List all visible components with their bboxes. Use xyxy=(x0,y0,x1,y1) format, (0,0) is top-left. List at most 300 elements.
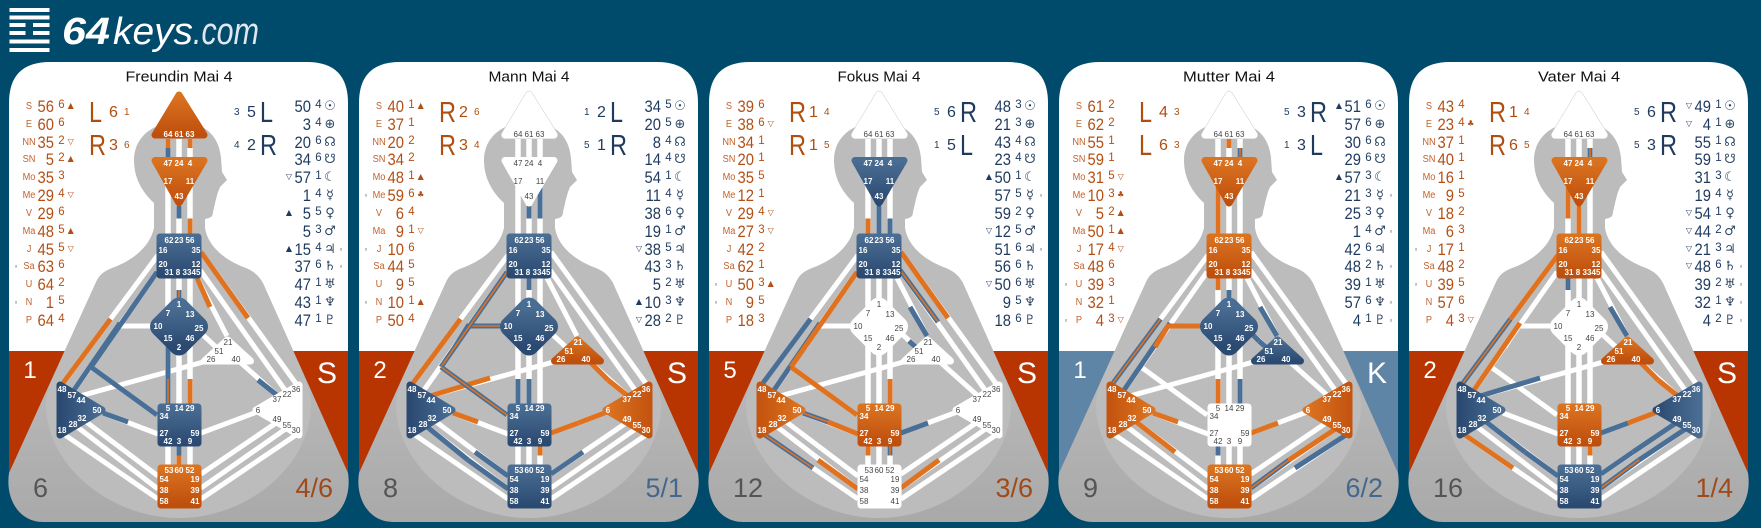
center: G: 46 xyxy=(536,334,545,343)
center: sacral: 34 xyxy=(860,412,869,421)
heading: Vater Mai 4 xyxy=(1538,68,1620,86)
center: sacral: 9 xyxy=(888,437,893,446)
center: heart: 51 xyxy=(915,347,924,356)
center: solar plexus xyxy=(256,385,301,435)
center: ajna: 11 xyxy=(1586,177,1595,186)
design gate table: N xyxy=(1076,297,1082,308)
center: solar plexus: 37 xyxy=(623,395,632,404)
center: root: 60 xyxy=(1225,466,1234,475)
design gate table: P xyxy=(1076,315,1082,326)
personality gate table: я xyxy=(1740,318,1743,324)
center: throat xyxy=(1559,236,1601,277)
personality gate table: 1 xyxy=(1365,277,1372,289)
design gate table: 1 xyxy=(408,224,415,236)
center: sacral: 34 xyxy=(510,412,519,421)
design gate table: ▲ xyxy=(68,101,75,110)
variable arrows right: 3 xyxy=(1297,137,1306,154)
center: throat: 16 xyxy=(1209,246,1218,255)
design gate table: U xyxy=(26,279,32,290)
body silhouette xyxy=(1408,122,1749,522)
design gate table: Me xyxy=(1073,190,1086,201)
band labels and bottom numbers: S xyxy=(667,357,687,390)
design gate table: NN xyxy=(1072,137,1086,148)
variable arrows left: 1 xyxy=(1509,104,1518,121)
center: root: 39 xyxy=(891,486,900,495)
center: heart: 51 xyxy=(1265,347,1274,356)
center: spleen: 32 xyxy=(78,414,87,423)
center: root: 19 xyxy=(1591,475,1600,484)
design gate table: S xyxy=(26,101,32,112)
personality gate table: ☊ xyxy=(324,135,336,150)
center: ajna: 4 xyxy=(1588,159,1593,168)
personality gate table: 51 xyxy=(995,241,1011,259)
design gate table: 1 xyxy=(46,294,54,312)
band labels and bottom numbers: 8 xyxy=(383,473,398,503)
center: spleen: 28 xyxy=(1119,420,1128,429)
center: root: 41 xyxy=(1241,497,1250,506)
center: head: 63 xyxy=(1236,130,1245,139)
band labels and bottom numbers xyxy=(23,357,337,503)
personality gate table: ♀ xyxy=(1375,206,1385,221)
design gate table: 1 xyxy=(408,99,415,111)
logo: 64keys.com xyxy=(10,8,259,53)
center: throat: 62 xyxy=(165,236,174,245)
center: sacral xyxy=(1560,404,1600,446)
design gate table: NN xyxy=(722,137,736,148)
design gate table: 48 xyxy=(1438,258,1454,276)
center: G xyxy=(1204,300,1254,352)
design gate table: 2 xyxy=(58,135,65,147)
design gate table: 9 xyxy=(396,276,404,294)
personality gate table: 1 xyxy=(315,277,322,289)
personality gate table: ☿ xyxy=(326,188,334,203)
personality gate table: 6 xyxy=(1365,152,1372,164)
design gate table: 10 xyxy=(1088,187,1104,205)
center: sacral xyxy=(160,404,200,446)
center: root: 58 xyxy=(860,497,869,506)
personality gate table: 4 xyxy=(665,152,672,164)
band labels and bottom numbers xyxy=(723,357,1037,503)
personality gate table: 43 xyxy=(295,294,311,312)
center: throat: 8 xyxy=(526,268,531,277)
center: ajna: 24 xyxy=(525,159,534,168)
center: ajna: 24 xyxy=(175,159,184,168)
center: heart: 26 xyxy=(1257,355,1266,364)
personality gate table: 29 xyxy=(1345,151,1361,169)
design gate table: 4 xyxy=(58,188,65,200)
center: throat: 31 xyxy=(1215,268,1224,277)
design gate table: 18 xyxy=(1438,205,1454,223)
center: sacral: 5 xyxy=(166,404,171,413)
body silhouette xyxy=(1058,122,1399,522)
center: heart: 40 xyxy=(1282,355,1291,364)
center: throat: 31 xyxy=(165,268,174,277)
center: solar plexus: 30 xyxy=(292,426,301,435)
center: root: 52 xyxy=(1586,466,1595,475)
band labels and bottom numbers xyxy=(373,357,687,503)
design gate table: 50 xyxy=(738,276,754,294)
design gate table: Mo xyxy=(1423,172,1436,183)
variable arrows left: 2 xyxy=(459,104,468,121)
personality gate table: ☉ xyxy=(1374,99,1386,114)
center: head xyxy=(1205,95,1254,139)
center: root xyxy=(1210,466,1250,506)
design gate table: J xyxy=(1427,244,1431,255)
band labels and bottom numbers: 1/4 xyxy=(1695,473,1733,503)
channels xyxy=(763,139,997,499)
design gate table: 35 xyxy=(38,134,54,152)
center: spleen: 50 xyxy=(1493,406,1502,415)
center: sacral: 29 xyxy=(1236,404,1245,413)
center: spleen: 32 xyxy=(778,414,787,423)
design gate table: 1 xyxy=(1108,135,1115,147)
center: throat: 33 xyxy=(183,268,192,277)
center: G: 1 xyxy=(1227,300,1232,309)
center: G: 13 xyxy=(186,310,195,319)
design gate table: 39 xyxy=(1438,276,1454,294)
personality gate table xyxy=(1336,98,1393,330)
variable arrows right: 4 xyxy=(234,140,240,151)
personality gate table xyxy=(1686,98,1743,330)
center: sacral: 5 xyxy=(866,404,871,413)
center: solar plexus: 36 xyxy=(292,385,301,394)
center: root: 60 xyxy=(525,466,534,475)
design gate table: 56 xyxy=(38,98,54,116)
variable arrows left: 3 xyxy=(459,137,468,154)
variable arrows right: 2 xyxy=(247,137,256,154)
personality gate table: 18 xyxy=(995,312,1011,330)
variable arrows left: 4 xyxy=(824,107,830,118)
center: sacral: 34 xyxy=(1560,412,1569,421)
type band xyxy=(359,351,698,478)
personality gate table: ♇ xyxy=(1724,313,1736,328)
center: head xyxy=(855,95,904,139)
design gate table: 6 xyxy=(1458,295,1465,307)
personality gate table: ▽ xyxy=(1686,244,1693,253)
center: root xyxy=(160,466,200,506)
center: throat: 12 xyxy=(542,260,551,269)
center: throat: 20 xyxy=(1559,260,1568,269)
band labels and bottom numbers: 5/1 xyxy=(645,473,683,503)
design gate table: Ma xyxy=(1073,226,1086,237)
center: G: 46 xyxy=(1586,334,1595,343)
design gate table: Sa xyxy=(723,261,735,272)
center: throat: 35 xyxy=(1242,246,1251,255)
center: throat: 56 xyxy=(886,236,895,245)
personality gate table: ♂ xyxy=(324,224,336,239)
center: ajna: 4 xyxy=(538,159,543,168)
center: throat: 35 xyxy=(192,246,201,255)
center: throat: 20 xyxy=(859,260,868,269)
personality gate table: 34 xyxy=(645,98,661,116)
personality gate table: ♇ xyxy=(1374,313,1386,328)
variable arrows left: 5 xyxy=(1524,140,1530,151)
center: G: 15 xyxy=(1564,334,1573,343)
design gate table: ▲ xyxy=(418,101,425,110)
personality gate table: 38 xyxy=(645,241,661,259)
design gate table: 17 xyxy=(1438,241,1454,259)
design gate table: 4 xyxy=(1446,312,1454,330)
personality gate table: ▽ xyxy=(986,279,993,288)
design gate table: 50 xyxy=(388,312,404,330)
center: throat: 16 xyxy=(509,246,518,255)
center: ajna: 17 xyxy=(1214,177,1223,186)
design gate table: 43 xyxy=(1438,98,1454,116)
personality gate table: ♃ xyxy=(1024,242,1036,257)
design gate table: 57 xyxy=(1438,294,1454,312)
center: root: 60 xyxy=(875,466,884,475)
personality gate table: я xyxy=(340,264,343,270)
center: spleen: 44 xyxy=(427,396,436,405)
personality gate table: 1 xyxy=(1365,313,1372,325)
center: head: 61 xyxy=(1225,130,1234,139)
design gate table: 64 xyxy=(38,276,54,294)
design gate table: 60 xyxy=(38,116,54,134)
center: throat: 20 xyxy=(1209,260,1218,269)
center: throat: 31 xyxy=(865,268,874,277)
center: sacral: 29 xyxy=(536,404,545,413)
personality gate table: 6 xyxy=(1365,295,1372,307)
center: root: 52 xyxy=(536,466,545,475)
center: G: 10 xyxy=(154,322,163,331)
personality gate table: 43 xyxy=(645,258,661,276)
center: G: 10 xyxy=(1554,322,1563,331)
design gate table: N xyxy=(1426,297,1432,308)
center: sacral: 59 xyxy=(191,429,200,438)
design gate table: 3 xyxy=(58,170,65,182)
design gate table: 6 xyxy=(758,99,765,111)
design gate table: 4 xyxy=(408,313,415,325)
personality gate table: 3 xyxy=(1365,188,1372,200)
personality gate table: 55 xyxy=(1695,134,1711,152)
design gate table: 1 xyxy=(1458,135,1465,147)
body silhouette xyxy=(708,122,1049,522)
center: spleen: 50 xyxy=(93,406,102,415)
variable arrows right: 3 xyxy=(1297,104,1306,121)
center: root: 19 xyxy=(541,475,550,484)
personality gate table: ▽ xyxy=(636,244,643,253)
personality gate table: ⊕ xyxy=(675,117,685,132)
design gate table: я xyxy=(1415,282,1418,288)
design gate table: 18 xyxy=(738,312,754,330)
type band xyxy=(709,351,1048,478)
design gate table: N xyxy=(376,297,382,308)
center: throat: 23 xyxy=(525,236,534,245)
design gate table xyxy=(365,98,425,330)
personality gate table: ☿ xyxy=(676,188,684,203)
center: ajna: 47 xyxy=(164,159,173,168)
design gate table: 5 xyxy=(758,170,765,182)
variable arrows right: R xyxy=(1660,130,1677,162)
personality gate table: ♂ xyxy=(1374,224,1386,239)
center: throat: 12 xyxy=(1592,260,1601,269)
center: G: 13 xyxy=(886,310,895,319)
personality gate table: ♀ xyxy=(325,206,335,221)
design gate table: 3 xyxy=(758,277,765,289)
channels xyxy=(1463,139,1697,499)
center: sacral: 14 xyxy=(875,404,884,413)
personality gate table: 43 xyxy=(995,134,1011,152)
center: solar plexus: 6 xyxy=(956,406,961,415)
design gate table: N xyxy=(726,297,732,308)
variable arrows left: R xyxy=(89,130,106,162)
center: sacral: 59 xyxy=(541,429,550,438)
personality gate table: 59 xyxy=(1695,151,1711,169)
design gate table: ♣ xyxy=(1467,119,1474,128)
personality gate table: ♃ xyxy=(1724,242,1736,257)
personality gate table: 6 xyxy=(1365,135,1372,147)
personality gate table: 3 xyxy=(665,295,672,307)
design gate table: P xyxy=(376,315,382,326)
center: root: 39 xyxy=(1241,486,1250,495)
variable arrows right: 2 xyxy=(597,104,606,121)
center: root: 54 xyxy=(510,475,519,484)
center: throat: 23 xyxy=(1575,236,1584,245)
variable arrows right: 6 xyxy=(1647,104,1656,121)
center: head: 61 xyxy=(525,130,534,139)
center: spleen: 48 xyxy=(1458,385,1467,394)
design gate table: 38 xyxy=(738,116,754,134)
personality gate table: 3 xyxy=(1365,170,1372,182)
center: spleen: 50 xyxy=(1143,406,1152,415)
design gate table: 5 xyxy=(1096,205,1104,223)
variable arrows left xyxy=(89,97,130,162)
variable arrows right: R xyxy=(260,130,277,162)
center: solar plexus: 36 xyxy=(992,385,1001,394)
design gate table: Mo xyxy=(723,172,736,183)
center: spleen: 57 xyxy=(768,391,777,400)
design gate table: E xyxy=(726,119,732,130)
center: throat: 45 xyxy=(892,268,901,277)
design gate table: 59 xyxy=(388,187,404,205)
band labels and bottom numbers: 9 xyxy=(1083,473,1098,503)
personality gate table: я xyxy=(1390,229,1393,235)
center: heart xyxy=(1254,338,1300,364)
channels xyxy=(63,139,297,499)
variable arrows right: 5 xyxy=(1634,140,1640,151)
center: G: 25 xyxy=(195,324,204,333)
design gate table: U xyxy=(726,279,732,290)
center: sacral: 3 xyxy=(177,437,182,446)
center: sacral: 59 xyxy=(1241,429,1250,438)
personality gate table: 1 xyxy=(665,170,672,182)
center: spleen: 48 xyxy=(1108,385,1117,394)
center: heart: 21 xyxy=(1274,338,1283,347)
center: throat: 45 xyxy=(542,268,551,277)
design gate table: SN xyxy=(1073,154,1085,165)
center: G: 46 xyxy=(886,334,895,343)
center: ajna: 43 xyxy=(175,192,184,201)
personality gate table: 6 xyxy=(1365,117,1372,129)
center: solar plexus: 6 xyxy=(606,406,611,415)
center: head: 63 xyxy=(1586,130,1595,139)
design gate table: ♣ xyxy=(1117,190,1124,199)
center: solar plexus: 36 xyxy=(1342,385,1351,394)
design gate table: Ma xyxy=(1423,226,1436,237)
personality gate table: я xyxy=(1390,193,1393,199)
variable arrows right: 1 xyxy=(597,137,606,154)
personality gate table: ⊕ xyxy=(1725,117,1735,132)
personality gate table: 44 xyxy=(1695,223,1711,241)
center: spleen xyxy=(1458,385,1502,435)
personality gate table: ▲ xyxy=(286,208,293,217)
center: solar plexus: 36 xyxy=(642,385,651,394)
center: head xyxy=(505,95,554,139)
personality gate table: ☾ xyxy=(1024,170,1036,185)
body silhouette xyxy=(8,122,349,522)
panel: Freundin Mai 4 xyxy=(8,62,349,522)
variable arrows left: R xyxy=(789,97,806,129)
center: solar plexus: 55 xyxy=(983,421,992,430)
center: ajna: 17 xyxy=(864,177,873,186)
variable arrows right: R xyxy=(1660,97,1677,129)
center: root: 39 xyxy=(541,486,550,495)
center: spleen: 50 xyxy=(793,406,802,415)
design gate table: я xyxy=(1065,282,1068,288)
personality gate table: 1 xyxy=(1715,117,1722,129)
center: sacral: 27 xyxy=(510,429,519,438)
center: head: 63 xyxy=(186,130,195,139)
center: sacral: 5 xyxy=(1216,404,1221,413)
center: spleen: 18 xyxy=(408,426,417,435)
personality gate table: 50 xyxy=(995,276,1011,294)
center: throat: 33 xyxy=(883,268,892,277)
personality gate table: 2 xyxy=(665,313,672,325)
personality gate table: ☾ xyxy=(674,170,686,185)
center: sacral: 3 xyxy=(877,437,882,446)
center: G: 15 xyxy=(864,334,873,343)
center: sacral: 14 xyxy=(525,404,534,413)
center: G: 10 xyxy=(854,322,863,331)
personality gate table: я xyxy=(1740,282,1743,288)
design gate table: 48 xyxy=(388,169,404,187)
personality gate table: ♅ xyxy=(1724,277,1736,292)
center: root: 53 xyxy=(865,466,874,475)
design gate table: 35 xyxy=(38,169,54,187)
center: root: 52 xyxy=(1236,466,1245,475)
design gate table: 9 xyxy=(1446,187,1454,205)
personality gate table: 57 xyxy=(1345,169,1361,187)
design gate table: 9 xyxy=(746,294,754,312)
personality gate table: 28 xyxy=(645,312,661,330)
center: throat: 45 xyxy=(1592,268,1601,277)
design gate table: 2 xyxy=(408,135,415,147)
personality gate table: 4 xyxy=(1703,116,1711,134)
personality gate table: 57 xyxy=(1345,294,1361,312)
center: G: 1 xyxy=(527,300,532,309)
design gate table: 34 xyxy=(388,151,404,169)
center: spleen: 18 xyxy=(1108,426,1117,435)
center: root: 39 xyxy=(191,486,200,495)
center: sacral: 5 xyxy=(1566,404,1571,413)
personality gate table: ☊ xyxy=(1724,135,1736,150)
center: G: 2 xyxy=(527,343,532,352)
center: heart: 21 xyxy=(924,338,933,347)
band labels and bottom numbers xyxy=(1423,357,1737,503)
panel: Fokus Mai 4 xyxy=(708,62,1049,522)
design gate table: 3 xyxy=(1108,188,1115,200)
design gate table: 2 xyxy=(58,152,65,164)
personality gate table: ▲ xyxy=(636,297,643,306)
center: solar plexus: 6 xyxy=(1306,406,1311,415)
center: G: 10 xyxy=(504,322,513,331)
band labels and bottom numbers: 3/6 xyxy=(995,473,1033,503)
heading: Mann Mai 4 xyxy=(488,68,570,86)
personality gate table: 2 xyxy=(1715,313,1722,325)
design gate table: P xyxy=(1426,315,1432,326)
center: sacral: 14 xyxy=(1225,404,1234,413)
center: ajna: 47 xyxy=(1564,159,1573,168)
